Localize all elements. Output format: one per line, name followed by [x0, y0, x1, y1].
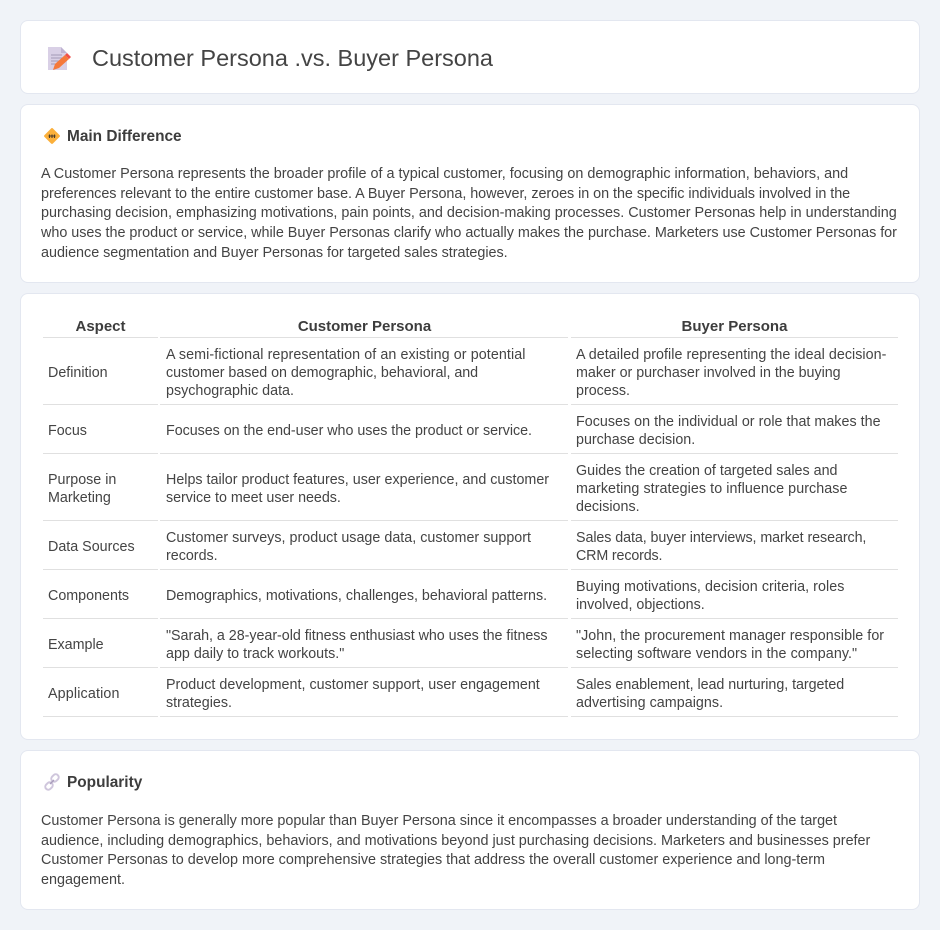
text: popularity body: engagement.: [41, 872, 125, 888]
cell: customer definition: A semi-fictional representation of an existing or potential: [166, 347, 526, 363]
table header: buyer persona: Buyer Persona: [682, 318, 787, 335]
text: popularity body: [41, 813, 870, 888]
cell: buyer data sources: [576, 530, 866, 564]
cell: customer data sources: Customer surveys, product usage data, customer support: [166, 530, 531, 546]
row: purpose in marketing: Purpose in: [48, 472, 116, 488]
cell: customer example: [166, 628, 548, 662]
row: purpose in marketing: Marketing: [48, 490, 111, 506]
heading: main difference: Main Difference: [67, 128, 182, 145]
cell: buyer example: "John, the procurement manager responsible for: [576, 628, 884, 644]
header card: [20, 20, 920, 94]
cell: customer definition: [166, 347, 526, 399]
table header: aspect: Aspect: [75, 318, 126, 335]
cell: customer application: Product development, customer support, user engagement: [166, 677, 540, 693]
cell: buyer components: involved, objections.: [576, 597, 705, 613]
cell: buyer application: [576, 677, 844, 711]
cell: buyer focus: purchase decision.: [576, 432, 695, 448]
row: focus: Focus: [48, 423, 87, 439]
text: main difference body: preferences relevant to the entire customer base. A Buyer Persona, however, zeroes in on the specific individuals involved in the: [41, 186, 850, 202]
cell: customer data sources: [166, 530, 531, 564]
heading: popularity: Popularity: [67, 774, 142, 791]
cell: buyer application: advertising campaigns.: [576, 695, 723, 711]
cell: customer application: strategies.: [166, 695, 232, 711]
cell: buyer data sources: Sales data, buyer interviews, market research,: [576, 530, 866, 546]
text: main difference body: who uses the product or service, while Buyer Personas clarify who actually makes the purchase. Marketers use Customer Personas for: [41, 225, 897, 241]
text: main difference body: audience segmentation and Buyer Personas for targeted sales strategies.: [41, 245, 508, 261]
cell: buyer purpose: Guides the creation of targeted sales and: [576, 463, 837, 479]
row: components: Components: [48, 588, 129, 604]
cell: customer purpose: service to meet user needs.: [166, 490, 341, 506]
panel: popularity: [20, 750, 920, 910]
cell: customer example: app daily to track workouts.": [166, 646, 344, 662]
cell: customer data sources: records.: [166, 548, 218, 564]
cell: buyer focus: Focuses on the individual or role that makes the: [576, 414, 881, 430]
cell: buyer focus: [576, 414, 881, 448]
cell: buyer definition: process.: [576, 383, 630, 399]
cell: buyer purpose: decisions.: [576, 499, 640, 515]
cell: buyer definition: A detailed profile representing the ideal decision-: [576, 347, 886, 363]
cell: customer purpose: [166, 472, 549, 506]
icon: document with pencil: [48, 47, 71, 70]
text: main difference body: purchasing decision, emphasizing motivations, pain points, and decision-making processes. Customer Personas help in understanding: [41, 205, 897, 221]
cell: customer focus: Focuses on the end-user who uses the product or service.: [166, 423, 532, 439]
cell: buyer example: selecting software vendors in the company.": [576, 646, 857, 662]
cell: buyer components: Buying motivations, decision criteria, roles: [576, 579, 844, 595]
cell: customer definition: customer based on demographic, behavioral, and: [166, 365, 478, 381]
cell: buyer example: [576, 628, 884, 662]
icon: chain link: [44, 773, 60, 791]
cell: buyer purpose: marketing strategies to influence purchase: [576, 481, 848, 497]
cell: customer definition: psychographic data.: [166, 383, 294, 399]
cell: buyer purpose: [576, 463, 848, 515]
table header: customer persona: Customer Persona: [298, 318, 431, 335]
text: popularity body: audience, including demographics, behaviors, and motivations beyond just purchasing decisions. Marketers and businesses prefer: [41, 833, 870, 849]
text: popularity body: Customer Personas to develop more comprehensive strategies that address the overall customer experience and long-term: [41, 852, 825, 868]
text: main difference body: [41, 166, 897, 261]
cell: customer example: "Sarah, a 28-year-old fitness enthusiast who uses the fitness: [166, 628, 548, 644]
text: main difference body: A Customer Persona represents the broader profile of a typical customer, focusing on demographic information, behaviors, and: [41, 166, 848, 182]
cell: customer components: Demographics, motivations, challenges, behavioral patterns.: [166, 588, 547, 604]
row: purpose in marketing: [48, 472, 116, 506]
icon: diamond sign: [44, 128, 60, 144]
cell: customer application: [166, 677, 540, 711]
cell: buyer data sources: CRM records.: [576, 548, 662, 564]
cell: buyer definition: [576, 347, 886, 399]
cell: buyer definition: maker or purchaser involved in the buying: [576, 365, 841, 381]
row: example: Example: [48, 637, 104, 653]
text: popularity body: Customer Persona is generally more popular than Buyer Persona since it encompasses a broader understanding of the target: [41, 813, 837, 829]
cell: customer purpose: Helps tailor product features, user experience, and customer: [166, 472, 549, 488]
row: application: Application: [48, 686, 120, 702]
panel: comparison table: [20, 293, 920, 740]
cell: buyer components: [576, 579, 844, 613]
row: data sources: Data Sources: [48, 539, 135, 555]
title: Customer Persona .vs. Buyer Persona: [92, 45, 493, 71]
row: definition: Definition: [48, 365, 108, 381]
panel: main difference: [20, 104, 920, 283]
cell: buyer application: Sales enablement, lead nurturing, targeted: [576, 677, 844, 693]
